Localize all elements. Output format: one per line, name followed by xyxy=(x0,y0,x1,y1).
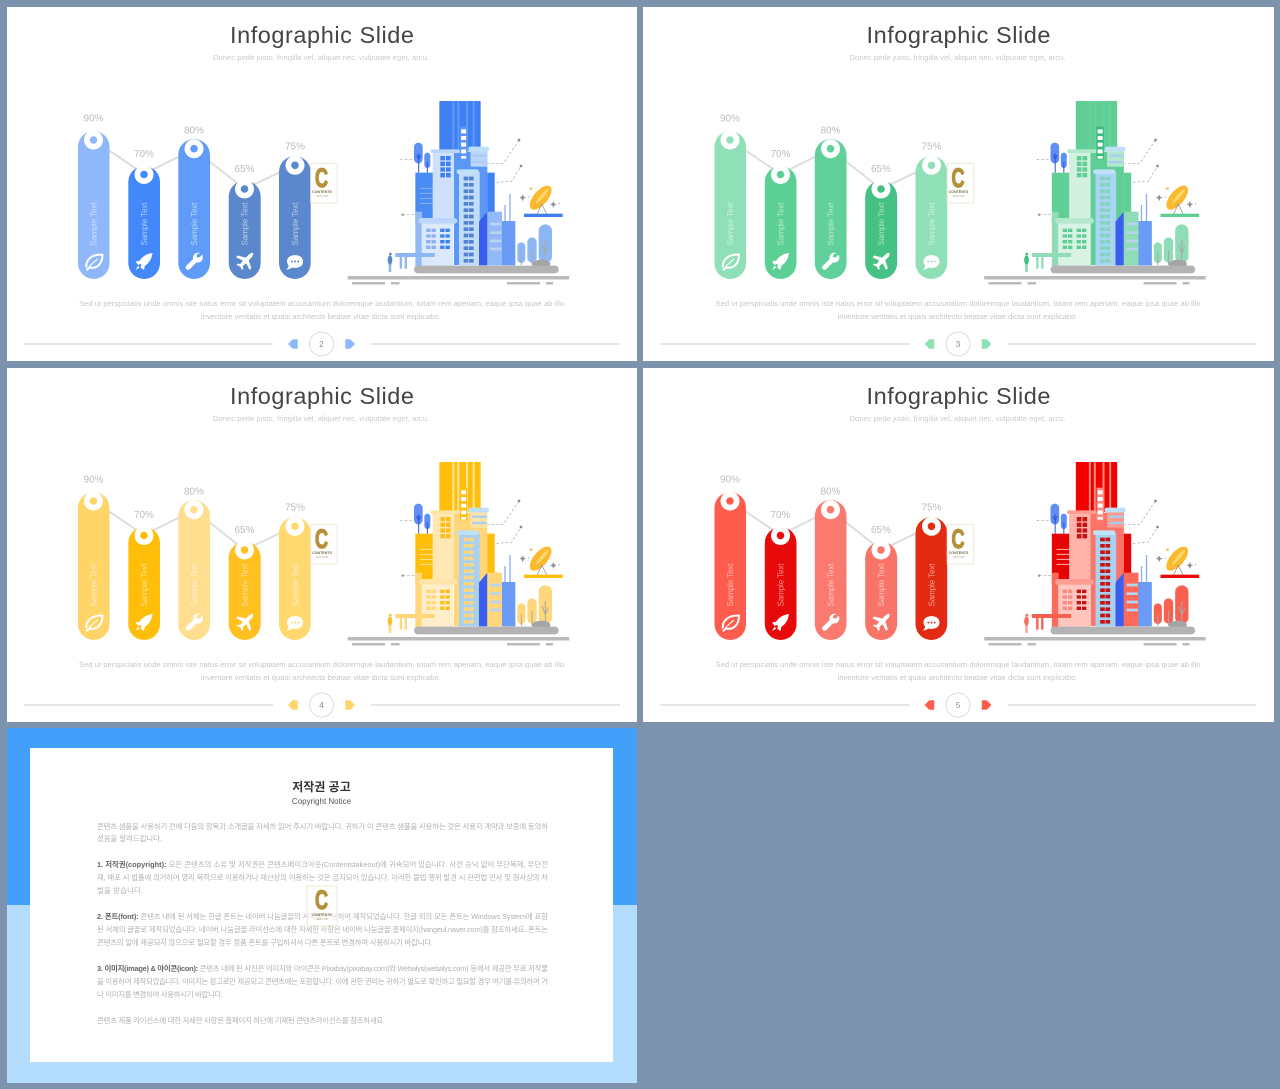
pill 70%: Sample Text xyxy=(140,563,149,606)
pill 75% xyxy=(279,142,311,279)
pill 75%: 75% xyxy=(921,142,942,152)
pill 70% xyxy=(128,149,160,279)
watermark badge: CONTENTS xyxy=(949,551,969,555)
body text xyxy=(716,299,1200,321)
watermark badge: CONTENTS xyxy=(312,190,332,194)
pill 80% xyxy=(178,126,210,279)
pill 90%: 90% xyxy=(83,114,104,124)
footer pagination: 2 xyxy=(319,340,324,349)
pill 90% xyxy=(78,114,110,279)
pill 90%: Sample Text xyxy=(90,563,99,606)
footer pagination: 4 xyxy=(319,701,324,710)
pill 65% xyxy=(865,525,897,640)
body text: inventore veritatis et quasi architecto beatae vitae dicta sunt explicabo. xyxy=(838,673,1078,682)
subtitle: Donec pede justo, fringilla vel, aliquet nec, vulputate eget, arcu. xyxy=(213,53,429,62)
pill 75% xyxy=(916,142,947,279)
pill 90% xyxy=(714,114,746,279)
body text xyxy=(79,299,564,321)
chart: pill percentages xyxy=(714,474,947,640)
pill 75% xyxy=(916,502,947,640)
pill 70% xyxy=(765,149,796,279)
pill 70% xyxy=(128,510,160,640)
pill 80%: Sample Text xyxy=(827,563,836,606)
pill 70% xyxy=(765,510,796,640)
copyright section 2: 2. 폰트(font): 콘텐츠 내에 된 서체는 한글 폰트는 네이버 나눔글꼴의 서체를 사용하여 제작되었습니다. 한글 외의 모든 폰트는 Windows System에 포함 xyxy=(97,912,548,921)
pill 65% xyxy=(229,164,261,279)
ground line xyxy=(984,637,1206,646)
pill 70%: Sample Text xyxy=(777,202,786,246)
body text: inventore veritatis et quasi architecto beatae vitae dicta sunt explicabo. xyxy=(201,673,441,682)
copyright section 1 xyxy=(97,860,548,895)
footer pagination xyxy=(24,332,620,356)
pill 75%: 75% xyxy=(285,142,305,152)
body text: inventore veritatis et quasi architecto beatae vitae dicta sunt explicabo. xyxy=(838,312,1078,321)
panel: slide 3 green xyxy=(643,7,1274,361)
ground line xyxy=(348,637,569,646)
pill 75%: Sample Text xyxy=(291,202,300,246)
watermark badge xyxy=(947,163,974,203)
pill 65%: Sample Text xyxy=(241,563,250,607)
watermark badge: MAX.COM xyxy=(316,918,328,921)
body text: Sed ut perspiciatis unde omnis iste natus error sit voluptatem accusantium doloremque laudantium, totam rem aperiam, eaque ipsa quae ab illo xyxy=(79,660,564,669)
pill 80% xyxy=(178,486,210,640)
copyright heading: Copyright Notice xyxy=(292,797,352,806)
pill 65%: 65% xyxy=(234,164,255,175)
pill 80% xyxy=(815,486,846,640)
copyright intro: 셨음을 알려드립니다. xyxy=(97,834,162,843)
pill 80%: 80% xyxy=(184,126,204,136)
body text: Sed ut perspiciatis unde omnis iste natus error sit voluptatem accusantium doloremque laudantium, totam rem aperiam, eaque ipsa quae ab illo xyxy=(716,299,1200,308)
copyright heading xyxy=(292,779,352,806)
pill 65%: Sample Text xyxy=(877,563,886,607)
pill 75% xyxy=(279,502,311,640)
body text: Sed ut perspiciatis unde omnis iste natus error sit voluptatem accusantium doloremque laudantium, totam rem aperiam, eaque ipsa quae ab illo xyxy=(79,299,564,308)
watermark badge xyxy=(947,524,974,564)
pill 80% xyxy=(815,126,846,279)
subtitle: Donec pede justo, fringilla vel, aliquet nec, vulputate eget, arcu. xyxy=(850,414,1066,423)
watermark badge: C xyxy=(315,524,328,554)
copyright section 3: 을 이용하여 제작되었습니다. 이미지는 참고로만 제공되고 콘텐츠에는 포함합니다. 이에 관한 권리는 귀하가 별도로 확인하고 필요할 경우 여기를 유의하여 거 xyxy=(97,977,548,986)
pill 80%: Sample Text xyxy=(190,202,199,246)
pill 90% xyxy=(714,474,746,640)
watermark badge: C xyxy=(315,163,328,193)
pill 70%: 70% xyxy=(770,510,791,521)
pill 65%: 65% xyxy=(871,525,891,536)
pill 70%: Sample Text xyxy=(777,563,786,606)
title: Infographic Slide xyxy=(866,22,1050,48)
pill 75%: 75% xyxy=(285,502,305,514)
chart: pill percentages xyxy=(78,474,311,640)
watermark badge: C xyxy=(315,885,328,915)
pill 90%: 90% xyxy=(720,474,740,486)
copyright section 1: 재, 배포 시 법률에 의거하여 영리 목적으로 이용하거나 재산상의 이용하는 것은 금지되어 있습니다. 이러한 불법 행위 발견 시 관련법 민사 및 형사상의 처 xyxy=(97,873,548,882)
chart: pill percentages xyxy=(78,114,311,279)
pill 65%: 65% xyxy=(234,525,255,536)
watermark badge: MAX.COM xyxy=(953,556,964,559)
illustration: city building xyxy=(1024,462,1199,634)
pill 65% xyxy=(865,164,897,279)
pill 90%: Sample Text xyxy=(90,202,99,246)
watermark badge xyxy=(311,524,337,564)
title: Infographic Slide xyxy=(866,383,1050,409)
ground line xyxy=(348,276,569,284)
body text xyxy=(79,660,564,682)
copyright heading: 저작권 공고 xyxy=(292,779,351,794)
pill 70%: 70% xyxy=(134,149,154,160)
footer pagination xyxy=(24,693,620,717)
copyright section 2: 콘텐츠의 일에 제공되지 않으므로 필요할 경우 정품 폰트를 구입하셔서 다른 폰트로 변경하여 사용하시기 바랍니다. xyxy=(97,938,433,947)
copyright section 1: 1. 저작권(copyright): 모든 콘텐츠의 소유 및 저작권은 콘텐츠메이크아웃(Contentstakeout)에 귀속되어 있습니다. 사전 승낙 없이 무단복제, 무단전 xyxy=(97,860,548,869)
watermark badge xyxy=(307,885,337,926)
pill 75%: 75% xyxy=(921,502,942,514)
pill 90%: Sample Text xyxy=(726,202,735,246)
body text: inventore veritatis et quasi architecto beatae vitae dicta sunt explicabo. xyxy=(201,312,441,321)
pill 90%: 90% xyxy=(83,474,104,486)
pill 80%: Sample Text xyxy=(827,202,836,246)
watermark badge: MAX.COM xyxy=(316,195,328,198)
watermark badge xyxy=(311,163,337,203)
copyright intro xyxy=(97,822,548,843)
title: Infographic Slide xyxy=(230,383,414,409)
subtitle: Donec pede justo, fringilla vel, aliquet nec, vulputate eget, arcu. xyxy=(213,414,429,423)
footer pagination xyxy=(660,332,1256,356)
panel: slide 2 blue xyxy=(7,7,637,361)
pill 65%: Sample Text xyxy=(241,202,250,246)
panel: slide 4 yellow xyxy=(7,368,637,722)
pill 70%: Sample Text xyxy=(140,202,149,246)
watermark badge: MAX.COM xyxy=(953,195,964,198)
body text: Sed ut perspiciatis unde omnis iste natus error sit voluptatem accusantium doloremque laudantium, totam rem aperiam, eaque ipsa quae ab illo xyxy=(716,660,1200,669)
copyright closing line: 콘텐츠 제품 라이선스에 대한 자세한 사항은 홈페이지 하단에 기재된 콘텐츠라이선스를 참조하세요. xyxy=(97,1016,385,1025)
pill 90%: Sample Text xyxy=(726,563,735,606)
illustration: city building xyxy=(388,101,563,273)
watermark badge: C xyxy=(952,163,964,193)
footer pagination: 3 xyxy=(956,340,961,349)
copyright section 2: 된 서체의 글꼴로 제작되었습니다. 네이버 나눔글꼴 라이선스에 대한 자세한 사항은 네이버 나눔글꼴 홈페이지(hangeul.naver.com)를 참조하세요. 폰트는 xyxy=(97,925,548,934)
watermark badge: CONTENTS xyxy=(312,551,332,555)
pill 70%: 70% xyxy=(134,510,154,521)
pill 90% xyxy=(78,474,110,640)
pill 75%: Sample Text xyxy=(928,563,937,606)
pill 75%: Sample Text xyxy=(928,202,937,246)
panel: slide 5 red xyxy=(643,368,1274,722)
illustration: city building xyxy=(388,462,563,634)
footer pagination xyxy=(660,693,1256,717)
footer pagination: 5 xyxy=(956,701,961,710)
pill 65% xyxy=(229,525,261,640)
chart: pill percentages xyxy=(714,114,947,279)
pill 65%: 65% xyxy=(871,164,891,175)
ground line xyxy=(984,276,1206,284)
body text xyxy=(716,660,1200,682)
title: Infographic Slide xyxy=(230,22,414,48)
pill 80%: 80% xyxy=(820,126,841,136)
watermark badge: CONTENTS xyxy=(312,913,332,917)
pill 65%: Sample Text xyxy=(877,202,886,246)
pill 80%: 80% xyxy=(820,486,841,498)
watermark badge: C xyxy=(952,524,964,554)
illustration: city building xyxy=(1024,101,1199,273)
pill 75%: Sample Text xyxy=(291,563,300,606)
panel: copyright notice xyxy=(7,728,637,1083)
watermark badge: CONTENTS xyxy=(949,190,969,194)
subtitle: Donec pede justo, fringilla vel, aliquet nec, vulputate eget, arcu. xyxy=(850,53,1066,62)
pill 80%: 80% xyxy=(184,486,204,498)
copyright section 3: 나 이미지를 변경하여 사용하시기 바랍니다. xyxy=(97,990,223,999)
copyright section 3: 3. 이미지(image) & 아이콘(icon): 콘텐츠 내에 된 사진은 이미지와 아이콘은 Pixabay(pixabay.com)와 Webalys(webalys.com) 등에서 제공한 무료 저작물 xyxy=(97,964,548,973)
copyright section 2 xyxy=(97,912,548,947)
pill 80%: Sample Text xyxy=(190,563,199,606)
pill 70%: 70% xyxy=(770,149,791,160)
copyright section 3 xyxy=(97,964,548,999)
watermark badge: MAX.COM xyxy=(316,556,328,559)
copyright intro: 콘텐츠 샘플을 사용하기 전에 다음의 항목과 소개글을 자세히 읽어 주시기 바랍니다. 귀하가 이 콘텐츠 샘플을 사용하는 것은 사용자 계약과 보증에 동의하 xyxy=(97,822,548,831)
copyright section 1: 벌을 받습니다. xyxy=(97,886,143,895)
pill 90%: 90% xyxy=(720,114,740,124)
